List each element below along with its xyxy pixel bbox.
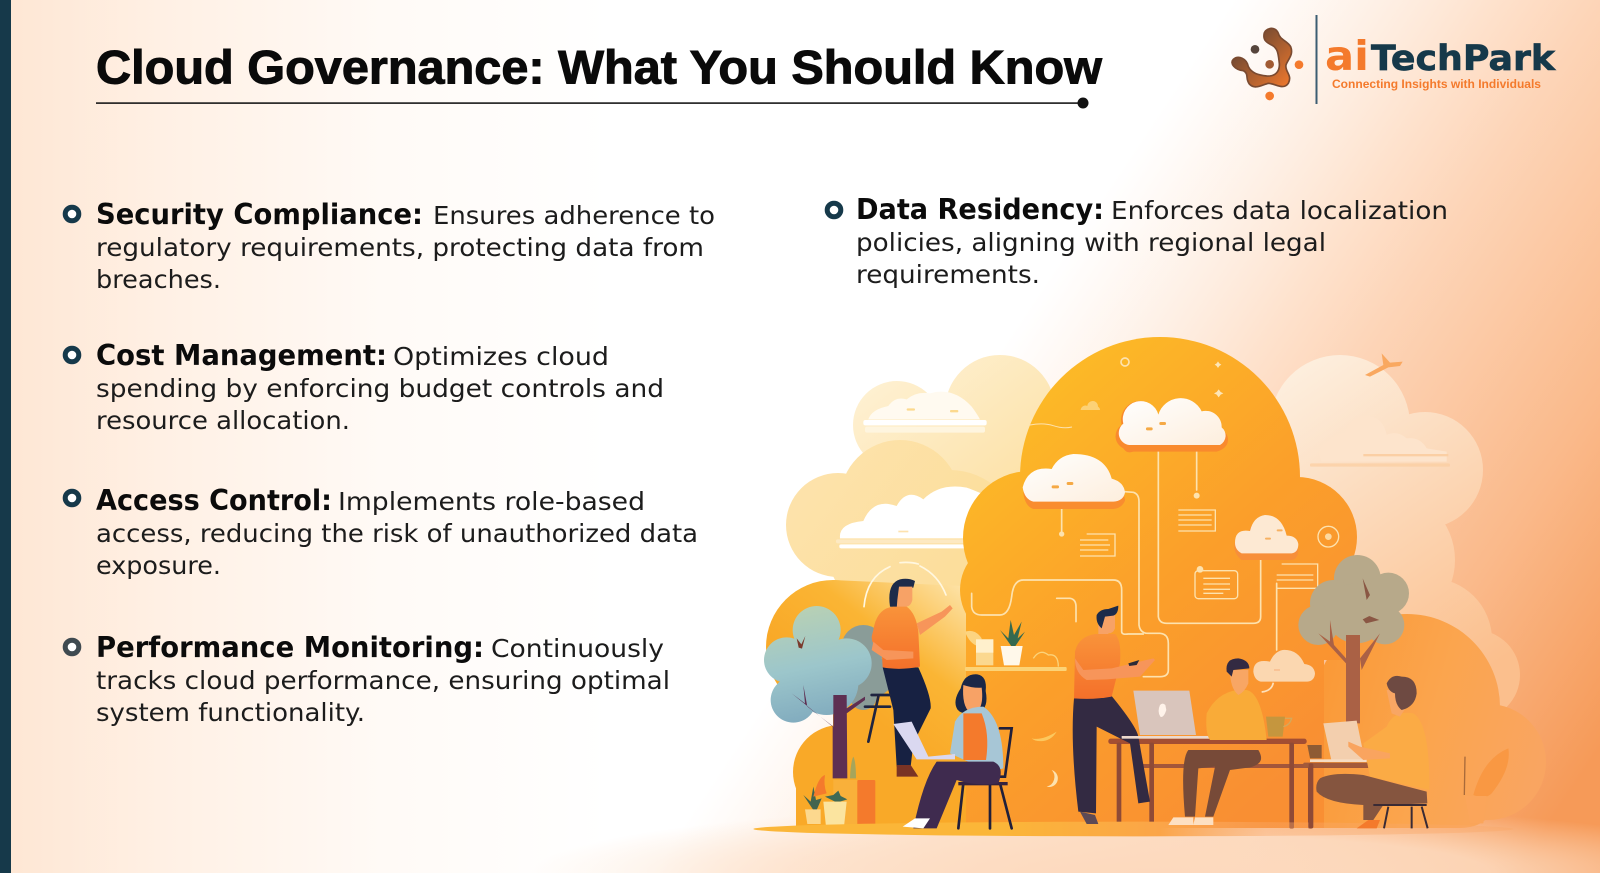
logo wordmark: ai <box>1325 32 1369 80</box>
body <box>1363 713 1429 790</box>
torso <box>872 607 920 669</box>
title underline <box>96 98 1088 108</box>
bullet <box>65 207 79 221</box>
back clouds right <box>1270 355 1520 720</box>
pants <box>883 667 931 767</box>
text block: Data Residency: <box>856 193 1104 226</box>
wire nodes <box>1059 493 1200 537</box>
plane <box>1365 353 1403 377</box>
bullet <box>827 203 841 217</box>
small sky marks <box>1030 358 1223 428</box>
cardigan <box>950 707 1003 772</box>
back clouds left <box>853 355 1060 540</box>
logo wordmark <box>1325 32 1556 80</box>
title: Cloud Governance: What You Should Know <box>96 40 1102 94</box>
shelf with plant <box>965 620 1067 671</box>
shirt <box>963 713 987 760</box>
person: seated woman <box>893 674 1012 828</box>
tree left <box>764 606 893 778</box>
stool <box>1373 805 1428 828</box>
side table <box>1303 763 1370 767</box>
text block <box>96 484 698 580</box>
text block: resource allocation. <box>96 406 350 435</box>
text block <box>96 631 670 727</box>
bullet <box>65 491 79 505</box>
illustration: cloud team <box>753 337 1546 836</box>
text block: Continuously <box>491 634 664 663</box>
text block: Access Control: <box>96 484 332 517</box>
table <box>1108 739 1403 829</box>
person: seated man <box>1168 658 1292 825</box>
item: cost management <box>65 339 664 435</box>
laptop <box>1133 691 1196 735</box>
tablet <box>1323 721 1365 762</box>
phone <box>1128 660 1139 666</box>
text block: Performance Monitoring: <box>96 631 484 664</box>
text block: Cost Management: <box>96 339 387 372</box>
person: seated right <box>1303 676 1429 828</box>
logo <box>1232 15 1556 104</box>
chair <box>958 728 1012 828</box>
hair <box>955 674 986 714</box>
arm <box>1348 742 1390 760</box>
text block: policies, aligning with regional legal <box>856 228 1326 257</box>
text block: requirements. <box>856 260 1040 289</box>
text block: Implements role-based <box>338 487 645 516</box>
cup <box>1266 717 1285 737</box>
text block: access, reducing the risk of unauthorized data <box>96 519 698 548</box>
logo tagline: Connecting Insights with Individuals <box>1332 79 1541 91</box>
text block <box>96 198 715 294</box>
text block: Ensures adherence to <box>433 201 715 230</box>
logo wordmark: TechPark <box>1371 39 1556 79</box>
laptop <box>893 722 955 759</box>
stool <box>865 695 890 742</box>
text block: regulatory requirements, protecting data from <box>96 233 704 262</box>
text block: spending by enforcing budget controls and <box>96 374 664 403</box>
cloud: left pale <box>836 487 983 548</box>
shoe <box>1080 812 1098 824</box>
logo mark <box>1232 28 1303 100</box>
legs <box>1316 774 1427 820</box>
torso <box>1074 634 1120 699</box>
bird mark <box>1032 732 1057 741</box>
cloud: top centre <box>1116 398 1228 452</box>
wires <box>972 445 1277 677</box>
text block: tracks cloud performance, ensuring optimal <box>96 666 670 695</box>
head <box>1387 690 1407 717</box>
person: standing man <box>1073 606 1248 824</box>
text block <box>856 193 1448 289</box>
item: access control <box>65 484 698 580</box>
legs <box>1183 750 1261 817</box>
item: performance monitoring <box>65 631 670 727</box>
cloud: right pale <box>1310 416 1450 467</box>
bullet <box>65 640 79 654</box>
item: data residency <box>827 193 1448 289</box>
cloud: upper left pale <box>863 392 987 433</box>
tree right <box>1298 555 1409 723</box>
plant right <box>1464 748 1509 823</box>
arm <box>1075 658 1155 680</box>
text block: Security Compliance: <box>96 198 423 231</box>
text block: Enforces data localization <box>1111 196 1448 225</box>
cloud: mid right <box>1234 515 1298 560</box>
text block <box>96 339 664 435</box>
data cards <box>1080 510 1339 599</box>
torso <box>1206 690 1267 740</box>
logo divider <box>1316 15 1318 104</box>
lower clouds left <box>766 580 1000 828</box>
text block: breaches. <box>96 265 221 294</box>
hair <box>889 579 915 608</box>
legs <box>913 762 1001 828</box>
head <box>1230 670 1248 695</box>
person: standing woman <box>864 562 953 777</box>
item: security compliance <box>65 198 715 294</box>
arms <box>872 605 953 660</box>
main cloud <box>960 337 1357 828</box>
text block: exposure. <box>96 551 221 580</box>
dashed arc <box>864 562 946 607</box>
cloud: lower right <box>1253 650 1315 692</box>
hair and head <box>1098 613 1115 640</box>
text block: Optimizes cloud <box>393 342 609 371</box>
pants <box>1073 696 1150 813</box>
planters <box>803 757 875 828</box>
text block: system functionality. <box>96 698 365 727</box>
mid cloud left <box>786 440 1020 610</box>
left accent bar <box>0 0 11 873</box>
lower cloud right <box>1290 614 1546 828</box>
cloud: centre left <box>1023 454 1125 509</box>
floor <box>753 822 1513 836</box>
shoe <box>897 765 918 777</box>
bullet <box>65 348 79 362</box>
